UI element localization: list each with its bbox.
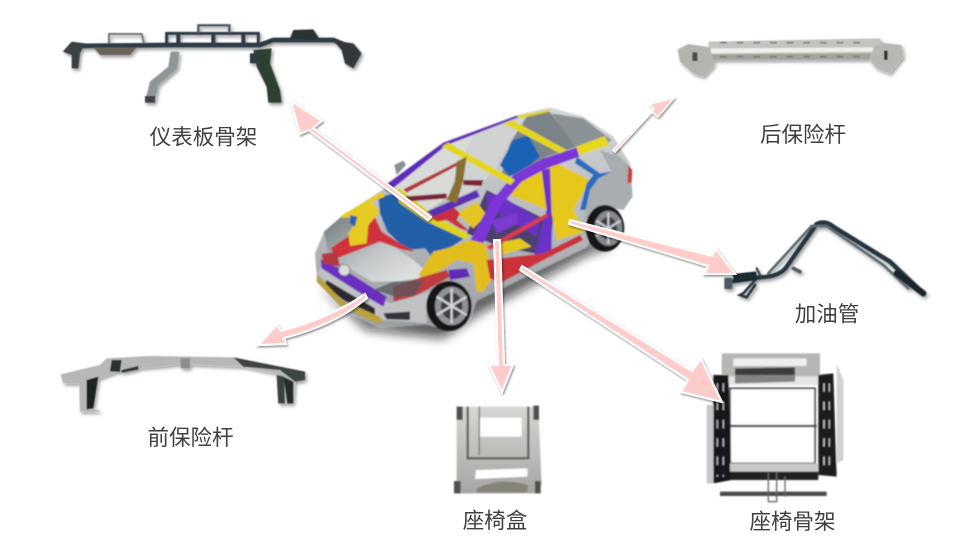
car silhouette xyxy=(315,107,633,330)
engine bay, blue xyxy=(378,193,467,257)
rear quarter panel xyxy=(583,150,633,220)
label: front bumper beam: 前保险杆 xyxy=(147,426,234,450)
blue rear wheel arch xyxy=(575,157,617,210)
part: front bumper beam xyxy=(61,356,305,412)
front pillar and fender, yellow xyxy=(418,240,493,292)
label: instrument panel frame: 仪表板骨架 xyxy=(150,126,257,150)
lower crossbar, gold xyxy=(317,275,383,323)
headlight xyxy=(373,280,424,297)
left leg bracket xyxy=(145,52,179,102)
front wheel xyxy=(426,281,472,331)
blue seat xyxy=(500,135,540,177)
rear wheel xyxy=(586,205,624,252)
part: seat frame xyxy=(707,353,843,502)
roof bow rear, yellow xyxy=(503,121,567,153)
part: instrument panel frame xyxy=(63,25,362,103)
label: rear bumper beam: 后保险杆 xyxy=(760,123,846,147)
arrow: car to fuel filler pipe xyxy=(569,220,735,274)
side glass xyxy=(457,117,530,200)
arrow: car to front bumper beam xyxy=(258,294,367,345)
strut tower, yellow xyxy=(341,192,385,246)
bumper beam, purple xyxy=(321,259,387,307)
car body-in-white illustration xyxy=(315,107,633,338)
arrow: car to instrument panel frame xyxy=(291,101,431,220)
bumper, grey xyxy=(317,267,443,323)
red cabin cross members xyxy=(403,193,447,202)
front fender red patch xyxy=(393,270,450,302)
B-pillar, purple xyxy=(533,168,552,260)
arrow: car to rear bumper beam xyxy=(613,98,674,152)
left inner pillar, yellow-brown xyxy=(447,157,467,203)
right leg bracket xyxy=(253,48,282,103)
ground shadow xyxy=(318,240,613,338)
part: seat box xyxy=(454,406,542,493)
label: fuel filler pipe: 加油管 xyxy=(795,302,859,326)
part: rear bumper beam xyxy=(678,38,903,77)
rear cabin interior xyxy=(500,110,577,180)
A-pillar and roof arc, purple xyxy=(471,147,579,245)
floor pan, yellow xyxy=(507,163,590,240)
part: fuel filler pipe xyxy=(728,222,923,297)
engine bay, red rails xyxy=(331,217,415,258)
hood xyxy=(324,215,426,282)
dark interior well xyxy=(467,190,553,257)
purple tunnel and sills xyxy=(427,190,480,217)
purple roof rail xyxy=(383,116,518,192)
cowl beam, yellow xyxy=(393,188,470,239)
arrow: car to seat frame xyxy=(520,266,722,402)
VW badge xyxy=(339,264,350,276)
rocker panel, red xyxy=(487,235,583,283)
label: seat box: 座椅盒 xyxy=(463,509,527,533)
C-pillar, yellow xyxy=(576,136,609,155)
arrow: car to seat box xyxy=(489,240,513,392)
roof bow front, yellow xyxy=(442,143,515,185)
side mirror xyxy=(394,161,406,175)
windshield xyxy=(395,136,473,212)
label: seat frame: 座椅骨架 xyxy=(749,510,836,534)
grille and lower intake xyxy=(325,280,375,315)
